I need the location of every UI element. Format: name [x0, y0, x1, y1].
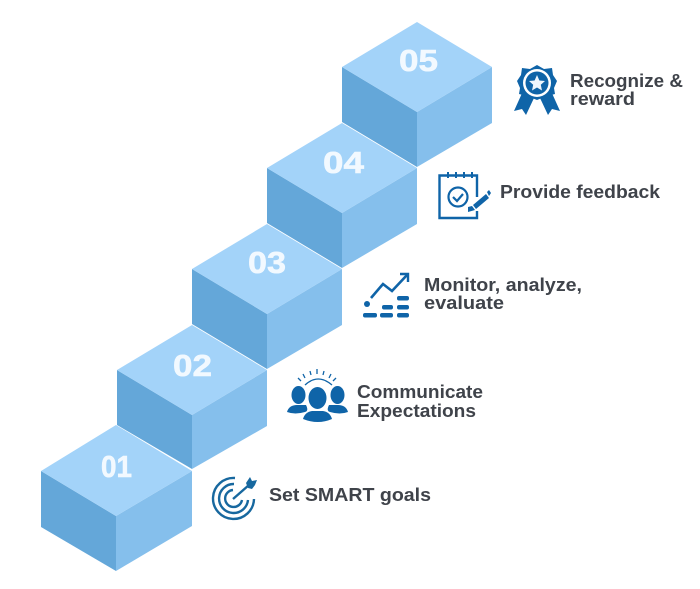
label: Provide feedback: Provide feedback	[500, 181, 661, 202]
label: Monitor, analyze, evaluate: evaluate	[424, 292, 504, 313]
icon: award ribbon	[514, 65, 560, 115]
icon: rising chart	[363, 274, 409, 318]
label: Recognize & reward	[570, 70, 683, 109]
step 04 block: 04	[323, 145, 365, 180]
label: Communicate Expectations: Communicate	[357, 381, 483, 402]
step 01 block: 01	[101, 449, 132, 484]
icon: clipboard with pencil	[440, 172, 491, 218]
label: Monitor, analyze, evaluate: Monitor, analyze,	[424, 274, 582, 295]
step 03 block: 03	[248, 245, 286, 280]
label: Set SMART goals: Set SMART goals	[269, 484, 431, 505]
icon: team of people	[287, 369, 348, 422]
step 04 block	[267, 123, 417, 268]
label: Communicate Expectations: Expectations	[357, 400, 476, 421]
step 05 block	[342, 22, 492, 167]
step 02 block	[117, 325, 267, 469]
label: Recognize & reward: reward	[570, 88, 635, 109]
label: Recognize & reward: Recognize &	[570, 70, 683, 91]
step 03 block	[192, 224, 342, 369]
label: Monitor, analyze, evaluate	[424, 274, 582, 313]
label: Communicate Expectations	[357, 381, 483, 421]
step 02 block: 02	[173, 348, 212, 383]
step 01 block	[41, 425, 192, 571]
step 05 block: 05	[399, 43, 438, 78]
icon: target with arrow	[213, 477, 257, 519]
